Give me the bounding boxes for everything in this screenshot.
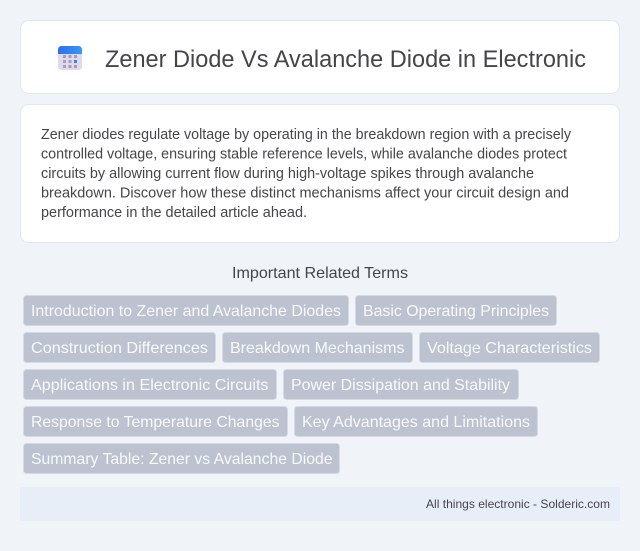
text block: summary paragraph: Zener diodes regulate voltage by operating in the breakdown region with a precisely <box>41 127 572 143</box>
title: Zener Diode Vs Avalanche Diode in Electronic <box>105 46 586 73</box>
tag: summary table <box>24 444 340 474</box>
text block: summary paragraph <box>41 127 572 221</box>
footer: All things electronic - Solderic.com <box>426 497 610 511</box>
tag: construction: Construction Differences <box>31 340 208 357</box>
heading: related terms: Important Related Terms <box>232 265 408 282</box>
tag: temperature: Response to Temperature Changes <box>31 414 280 431</box>
tag: applications: Applications in Electronic Circuits <box>31 377 268 394</box>
tag: applications <box>24 370 276 400</box>
tag: breakdown: Breakdown Mechanisms <box>230 340 404 357</box>
text block: summary paragraph: performance in the detailed article ahead. <box>41 205 307 221</box>
tag: construction <box>24 332 216 362</box>
tag: operating principles <box>356 296 556 326</box>
tag: summary table: Summary Table: Zener vs Avalanche Diode <box>31 451 333 468</box>
tag: power <box>284 370 518 400</box>
tag: temperature <box>24 406 288 436</box>
tag: introduction: Introduction to Zener and Avalanche Diodes <box>31 303 341 320</box>
tag: breakdown <box>222 332 412 362</box>
text block: summary paragraph: controlled voltage, ensuring stable reference levels, while avalanche diodes protect <box>41 146 567 162</box>
footer <box>20 487 620 521</box>
tag: operating principles: Basic Operating Principles <box>363 303 549 320</box>
tag: voltage <box>420 332 600 362</box>
tag: power: Power Dissipation and Stability <box>291 377 510 394</box>
panel: header <box>20 20 620 94</box>
panel: summary <box>20 104 620 242</box>
text block: summary paragraph: breakdown. Discover how these distinct mechanisms affect your circuit design and <box>41 186 569 202</box>
text block: summary paragraph: circuits by allowing current flow during high-voltage spikes through avalanche <box>41 166 534 182</box>
tag: advantages <box>294 406 538 436</box>
tag: advantages: Key Advantages and Limitations <box>302 414 530 431</box>
tag: voltage: Voltage Characteristics <box>427 340 592 357</box>
tag: introduction <box>24 296 348 326</box>
panel: related term tags <box>24 296 600 474</box>
icon: calendar grid <box>58 46 82 70</box>
